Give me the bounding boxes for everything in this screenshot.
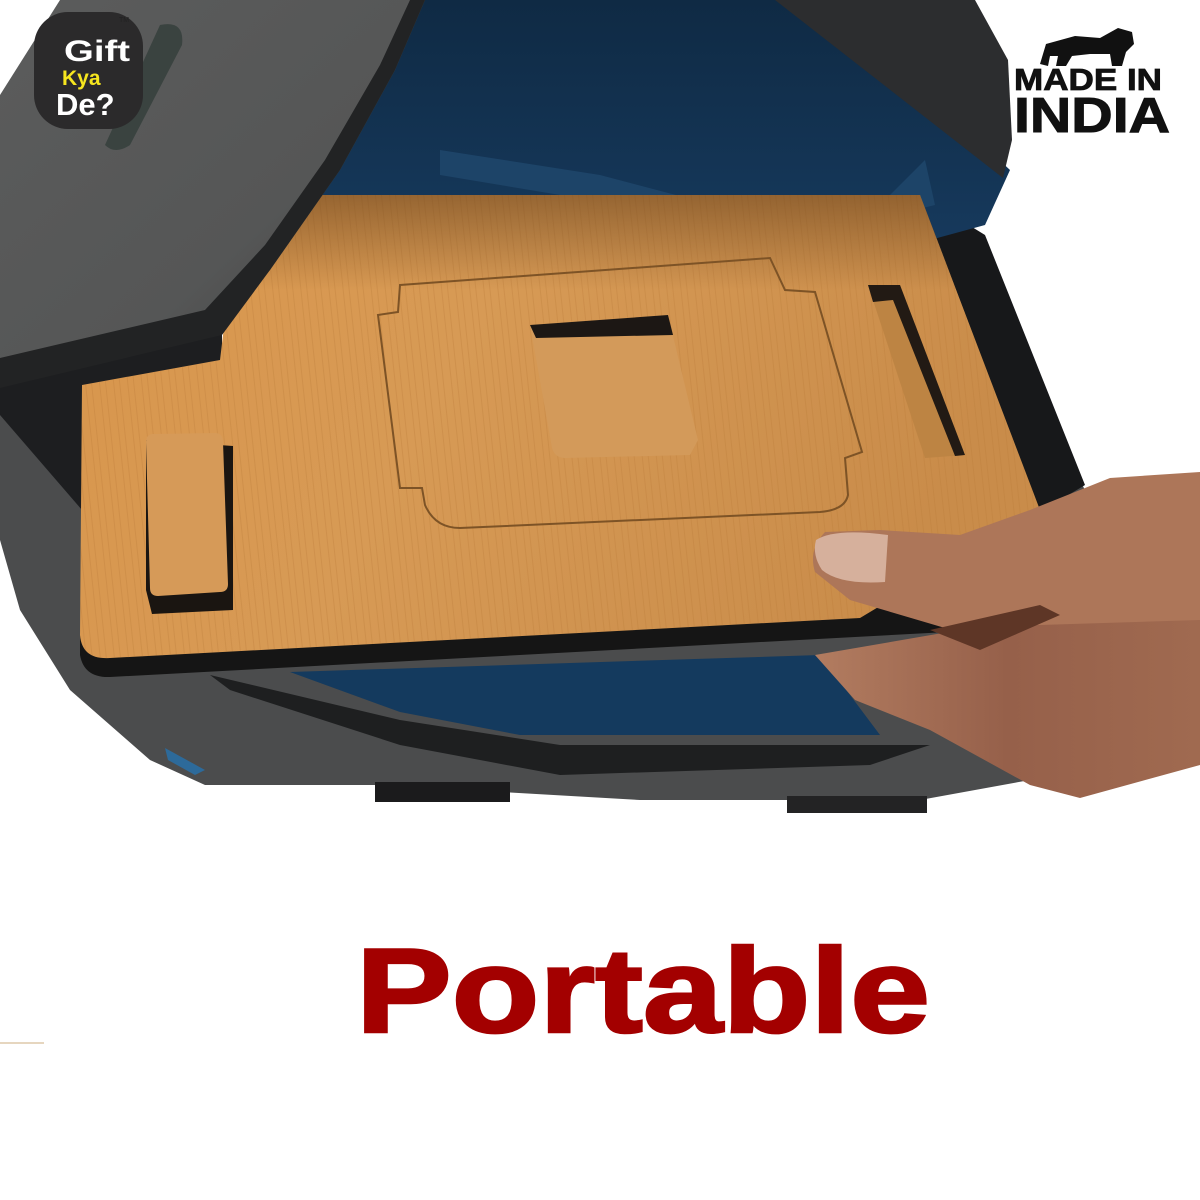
centre slot shadow [530, 315, 673, 338]
backpack [0, 0, 1085, 813]
board face [80, 195, 1040, 658]
left zipper gap [0, 330, 222, 510]
heading: Portable: Portable [356, 924, 930, 1058]
back of hand [813, 472, 1200, 628]
brand logo badge: Gift [64, 35, 130, 68]
thumbnail [815, 532, 888, 582]
lower zipper [210, 675, 930, 775]
logo patch on flap [105, 24, 182, 150]
bamboo laptop stand board [80, 195, 1040, 677]
centre slot [530, 315, 698, 458]
flap zipper edge [0, 0, 425, 388]
top shade of board [200, 195, 957, 290]
made in india badge: INDIA [1014, 89, 1170, 143]
made in india badge [1014, 28, 1170, 143]
blue tag [165, 748, 205, 775]
inner pocket fold [440, 150, 935, 238]
right top flap [775, 0, 1012, 178]
right slot [868, 285, 965, 458]
brand logo badge [34, 12, 143, 129]
brand logo badge: Kya [62, 67, 101, 90]
straps [375, 782, 510, 802]
icon: lion [1040, 28, 1134, 66]
brand logo badge: De? [56, 87, 115, 122]
finger shadow [930, 605, 1060, 650]
hand lower [815, 600, 1200, 798]
board edge [80, 490, 1040, 677]
small tan mark at left edge [0, 1042, 44, 1044]
stand cutout outline [378, 258, 862, 528]
backpack lower body [0, 330, 1085, 800]
hand holding the board [813, 472, 1200, 798]
made in india badge: MADE IN [1014, 62, 1162, 97]
top grey flap of backpack [0, 0, 425, 388]
blue interior lining [300, 0, 1010, 240]
left small tab [146, 433, 228, 596]
backpack right edge [920, 195, 1085, 512]
lower blue padding [290, 655, 880, 735]
brand logo badge: TM [119, 17, 129, 24]
left tab shadow [146, 440, 233, 614]
